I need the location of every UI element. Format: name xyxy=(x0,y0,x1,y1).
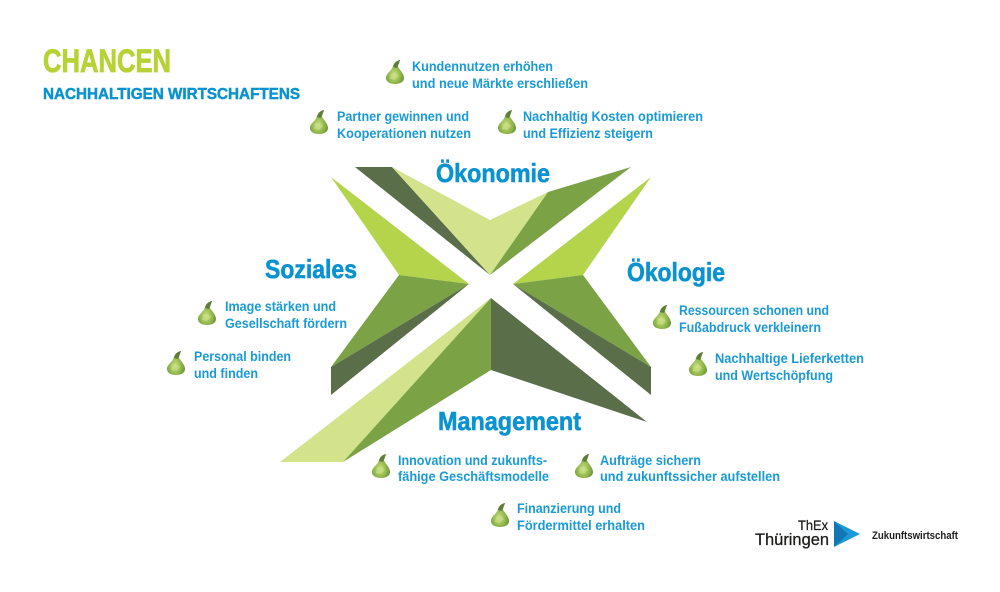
item: Kosten: und Effizienz steigern xyxy=(523,126,653,141)
item: Ressourcen: Ressourcen schonen und xyxy=(679,303,829,318)
item: Lieferketten: und Wertschöpfung xyxy=(715,368,833,383)
diagram: four-pointed star xyxy=(280,167,651,462)
item: Innovation xyxy=(372,453,549,484)
item: Finanzierung: Finanzierung und xyxy=(517,501,621,516)
logo: ThEx Thüringen: Thüringen xyxy=(755,530,829,549)
star arm: Ökologie xyxy=(513,177,651,395)
heading: Ökologie: Ökologie xyxy=(627,257,725,287)
item: Kundennutzen: und neue Märkte erschließen xyxy=(412,76,588,91)
item: Aufträge: und zukunftssicher aufstellen xyxy=(600,469,780,484)
item: Kundennutzen: Kundennutzen erhöhen xyxy=(412,59,553,74)
heading: Management: Management xyxy=(438,406,581,436)
item: Finanzierung: Fördermittel erhalten xyxy=(517,518,645,533)
heading: Ökonomie: Ökonomie xyxy=(436,158,550,188)
star arm: Management xyxy=(280,298,647,462)
item: Innovation: fähige Geschäftsmodelle xyxy=(398,469,549,484)
item: Partner xyxy=(310,109,471,141)
item: Kosten xyxy=(498,109,703,141)
logo: ThEx Thüringen: ThEx xyxy=(798,517,828,533)
item: Ressourcen xyxy=(653,303,829,335)
title: Chancen: CHANCEN xyxy=(43,43,171,79)
label: Zukunftswirtschaft: Zukunftswirtschaft xyxy=(872,530,958,542)
logo: ThEx Thüringen xyxy=(755,517,860,549)
item: Personal: und finden xyxy=(194,366,258,381)
item: Personal xyxy=(167,349,291,381)
item: Innovation: Innovation und zukunfts- xyxy=(398,453,547,468)
item: Personal: Personal binden xyxy=(194,349,291,364)
item: Image xyxy=(198,299,347,331)
subtitle: Nachhaltigen Wirtschaftens: NACHHALTIGEN WIRTSCHAFTENS xyxy=(43,86,300,103)
star arm: Soziales xyxy=(331,177,469,395)
item: Finanzierung xyxy=(491,501,645,533)
item: Kosten: Nachhaltig Kosten optimieren xyxy=(523,109,703,124)
item: Image: Gesellschaft fördern xyxy=(225,316,347,331)
item: Ressourcen: Fußabdruck verkleinern xyxy=(679,320,821,335)
item: Partner: Kooperationen nutzen xyxy=(337,126,471,141)
item: Aufträge xyxy=(575,453,780,484)
heading: Soziales: Soziales xyxy=(265,254,357,284)
item: Lieferketten: Nachhaltige Lieferketten xyxy=(715,351,864,366)
item: Image: Image stärken und xyxy=(225,299,336,314)
item: Kundennutzen xyxy=(386,59,588,91)
star arm: Ökonomie xyxy=(355,167,631,275)
item: Aufträge: Aufträge sichern xyxy=(600,453,701,468)
item: Partner: Partner gewinnen und xyxy=(337,109,469,124)
item: Lieferketten xyxy=(689,351,864,383)
